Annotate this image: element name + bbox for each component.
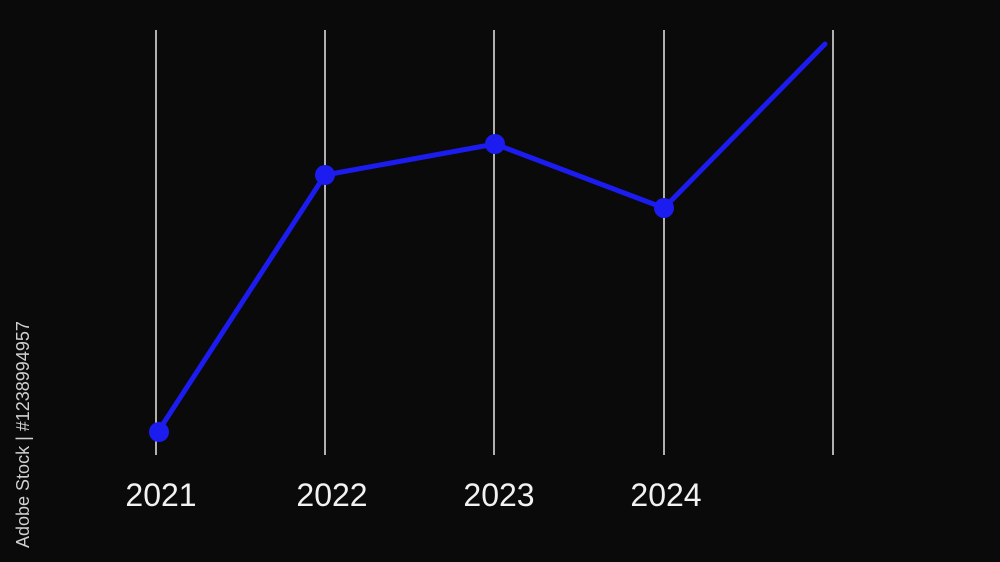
year labels: 2021 — [125, 477, 197, 513]
year labels: 2023 — [463, 477, 535, 513]
watermark id: Adobe Stock | #1238994957 — [13, 321, 33, 548]
year labels — [125, 477, 702, 513]
gridlines: year columns — [156, 30, 833, 455]
year labels: 2022 — [296, 477, 368, 513]
year labels: 2024 — [630, 477, 702, 513]
data line — [149, 44, 825, 442]
